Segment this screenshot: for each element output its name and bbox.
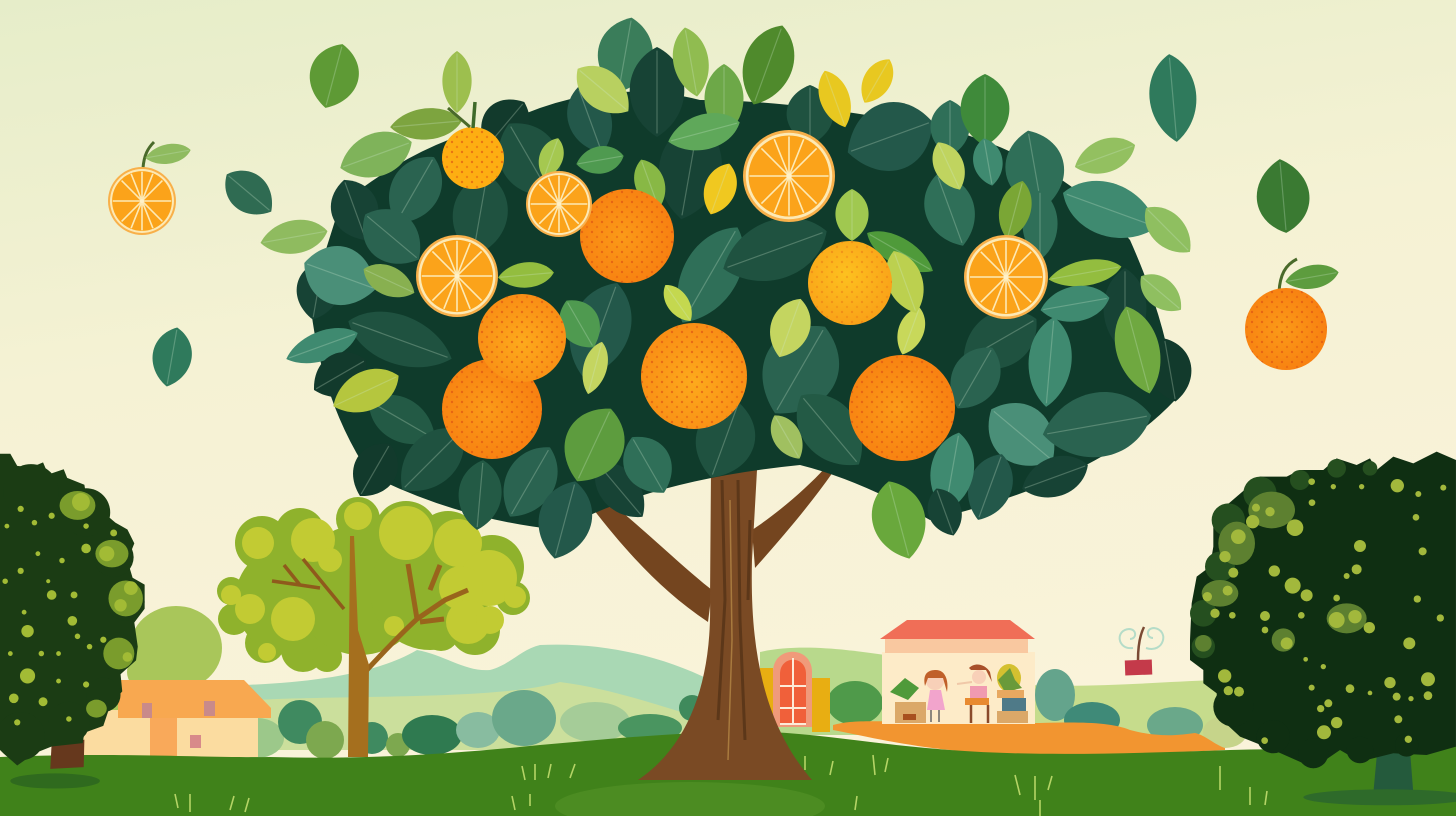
shop figures and goods	[890, 664, 1028, 723]
amber orange	[808, 241, 892, 325]
ground highlight	[555, 782, 825, 816]
left house	[82, 680, 271, 757]
orange slice	[526, 171, 592, 237]
orange path	[833, 721, 1225, 754]
whole orange	[641, 323, 747, 429]
grass tufts	[175, 755, 1267, 816]
left dark bush	[0, 454, 145, 789]
dark leaves	[281, 13, 1197, 565]
middle light green tree	[217, 497, 530, 757]
falling whole orange	[1245, 259, 1341, 370]
small kite ornament	[1120, 627, 1163, 675]
right building	[880, 620, 1035, 724]
canopy	[258, 13, 1202, 565]
distant hills	[245, 645, 1225, 750]
distant bushes	[200, 669, 1247, 759]
whole orange	[442, 359, 542, 459]
small light green tree	[104, 606, 222, 751]
orange slice	[964, 235, 1048, 319]
trunk and branches	[590, 468, 833, 780]
falling orange slice	[108, 140, 192, 235]
whole orange	[478, 294, 566, 382]
ground	[0, 732, 1456, 816]
right dark bush	[1190, 452, 1456, 805]
orange slice	[743, 130, 835, 222]
arched door	[760, 652, 830, 732]
floating leaves	[148, 38, 1312, 390]
whole orange	[849, 355, 955, 461]
whole orange	[442, 102, 504, 189]
whole orange	[580, 189, 674, 283]
light leaves	[258, 17, 1202, 565]
orange slice	[416, 235, 498, 317]
canopy dark mass	[310, 92, 1175, 530]
